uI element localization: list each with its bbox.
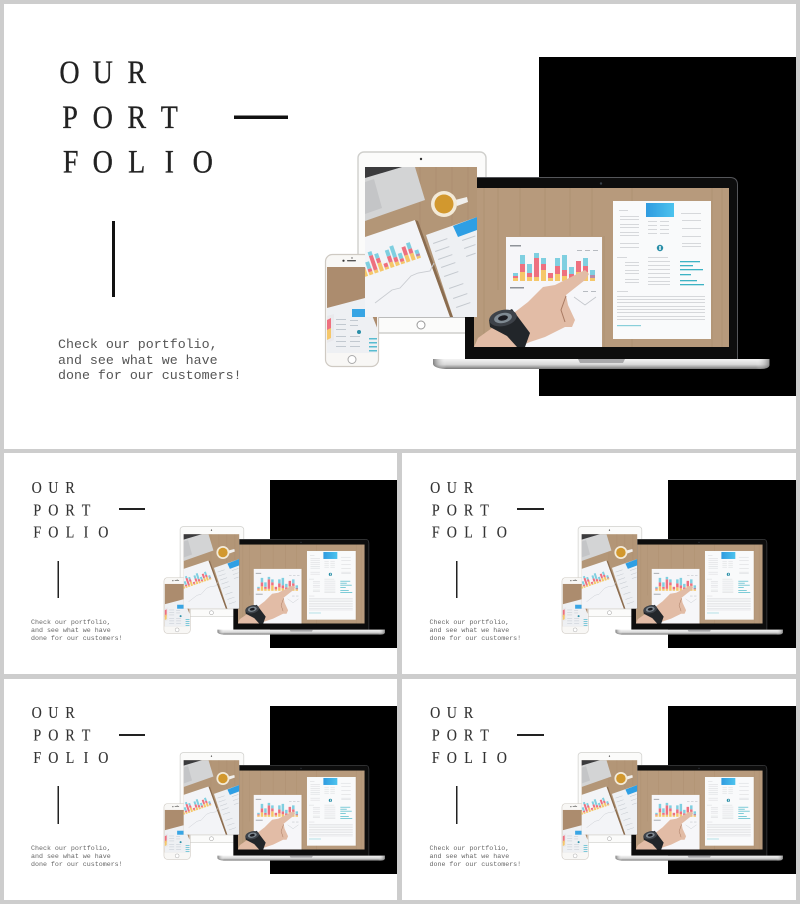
- body text: and see what we have: [31, 852, 111, 860]
- panel: thumbnail top left: [4, 453, 397, 674]
- body text: done for our customers!: [430, 860, 521, 868]
- horizontal accent line: [119, 734, 145, 736]
- body text: done for our customers!: [31, 860, 123, 868]
- device mockups: [562, 527, 783, 635]
- title: PORT: [33, 501, 91, 520]
- black backdrop block: [668, 706, 796, 874]
- device mockups: [164, 753, 385, 861]
- body text: [31, 844, 123, 868]
- panel: large slide: [4, 4, 796, 449]
- title: [32, 704, 108, 767]
- vertical accent line: [58, 561, 59, 598]
- title: OUR: [32, 479, 75, 497]
- body text: done for our customers!: [31, 634, 123, 642]
- title: FOLIO: [432, 749, 507, 767]
- title: [59, 54, 213, 180]
- horizontal accent line: [517, 734, 544, 736]
- device mockups: [562, 753, 783, 861]
- black backdrop block: [539, 57, 796, 396]
- body text: [430, 844, 521, 868]
- black backdrop block: [270, 706, 397, 874]
- vertical accent line: [456, 786, 458, 824]
- title: OUR: [430, 479, 474, 497]
- title: [32, 479, 108, 542]
- title: PORT: [62, 99, 178, 136]
- title: FOLIO: [33, 749, 108, 767]
- device mockups: [326, 152, 770, 369]
- body text: done for our customers!: [430, 634, 521, 642]
- body text: Check our portfolio,: [31, 618, 111, 626]
- body text: Check our portfolio,: [31, 844, 111, 852]
- body text: [58, 337, 242, 383]
- horizontal accent line: [119, 508, 145, 510]
- body text: Check our portfolio,: [430, 618, 509, 626]
- body text: [430, 618, 521, 642]
- panel: thumbnail bottom left: [4, 679, 397, 900]
- black backdrop block: [668, 480, 796, 648]
- body text: and see what we have: [430, 626, 509, 634]
- title: [430, 704, 507, 767]
- title: PORT: [432, 501, 489, 520]
- vertical accent line: [456, 561, 458, 598]
- title: FOLIO: [33, 523, 108, 542]
- vertical accent line: [112, 221, 115, 297]
- body text: Check our portfolio,: [58, 337, 218, 352]
- device mockups: [164, 527, 385, 635]
- title: PORT: [432, 726, 489, 745]
- title: OUR: [430, 704, 474, 722]
- vertical accent line: [58, 786, 59, 824]
- title: OUR: [59, 54, 147, 91]
- body text: [31, 618, 123, 642]
- horizontal accent line: [234, 116, 288, 119]
- title: OUR: [32, 704, 75, 722]
- panel: thumbnail top right: [402, 453, 796, 674]
- title: FOLIO: [432, 523, 507, 542]
- body text: and see what we have: [31, 626, 111, 634]
- body text: done for our customers!: [58, 368, 242, 383]
- title: PORT: [33, 726, 91, 745]
- black backdrop block: [270, 480, 397, 648]
- body text: Check our portfolio,: [430, 844, 509, 852]
- title: FOLIO: [63, 143, 213, 180]
- body text: and see what we have: [430, 852, 509, 860]
- panel: thumbnail bottom right: [402, 679, 796, 900]
- body text: and see what we have: [58, 353, 218, 368]
- horizontal accent line: [517, 508, 544, 510]
- title: [430, 479, 507, 542]
